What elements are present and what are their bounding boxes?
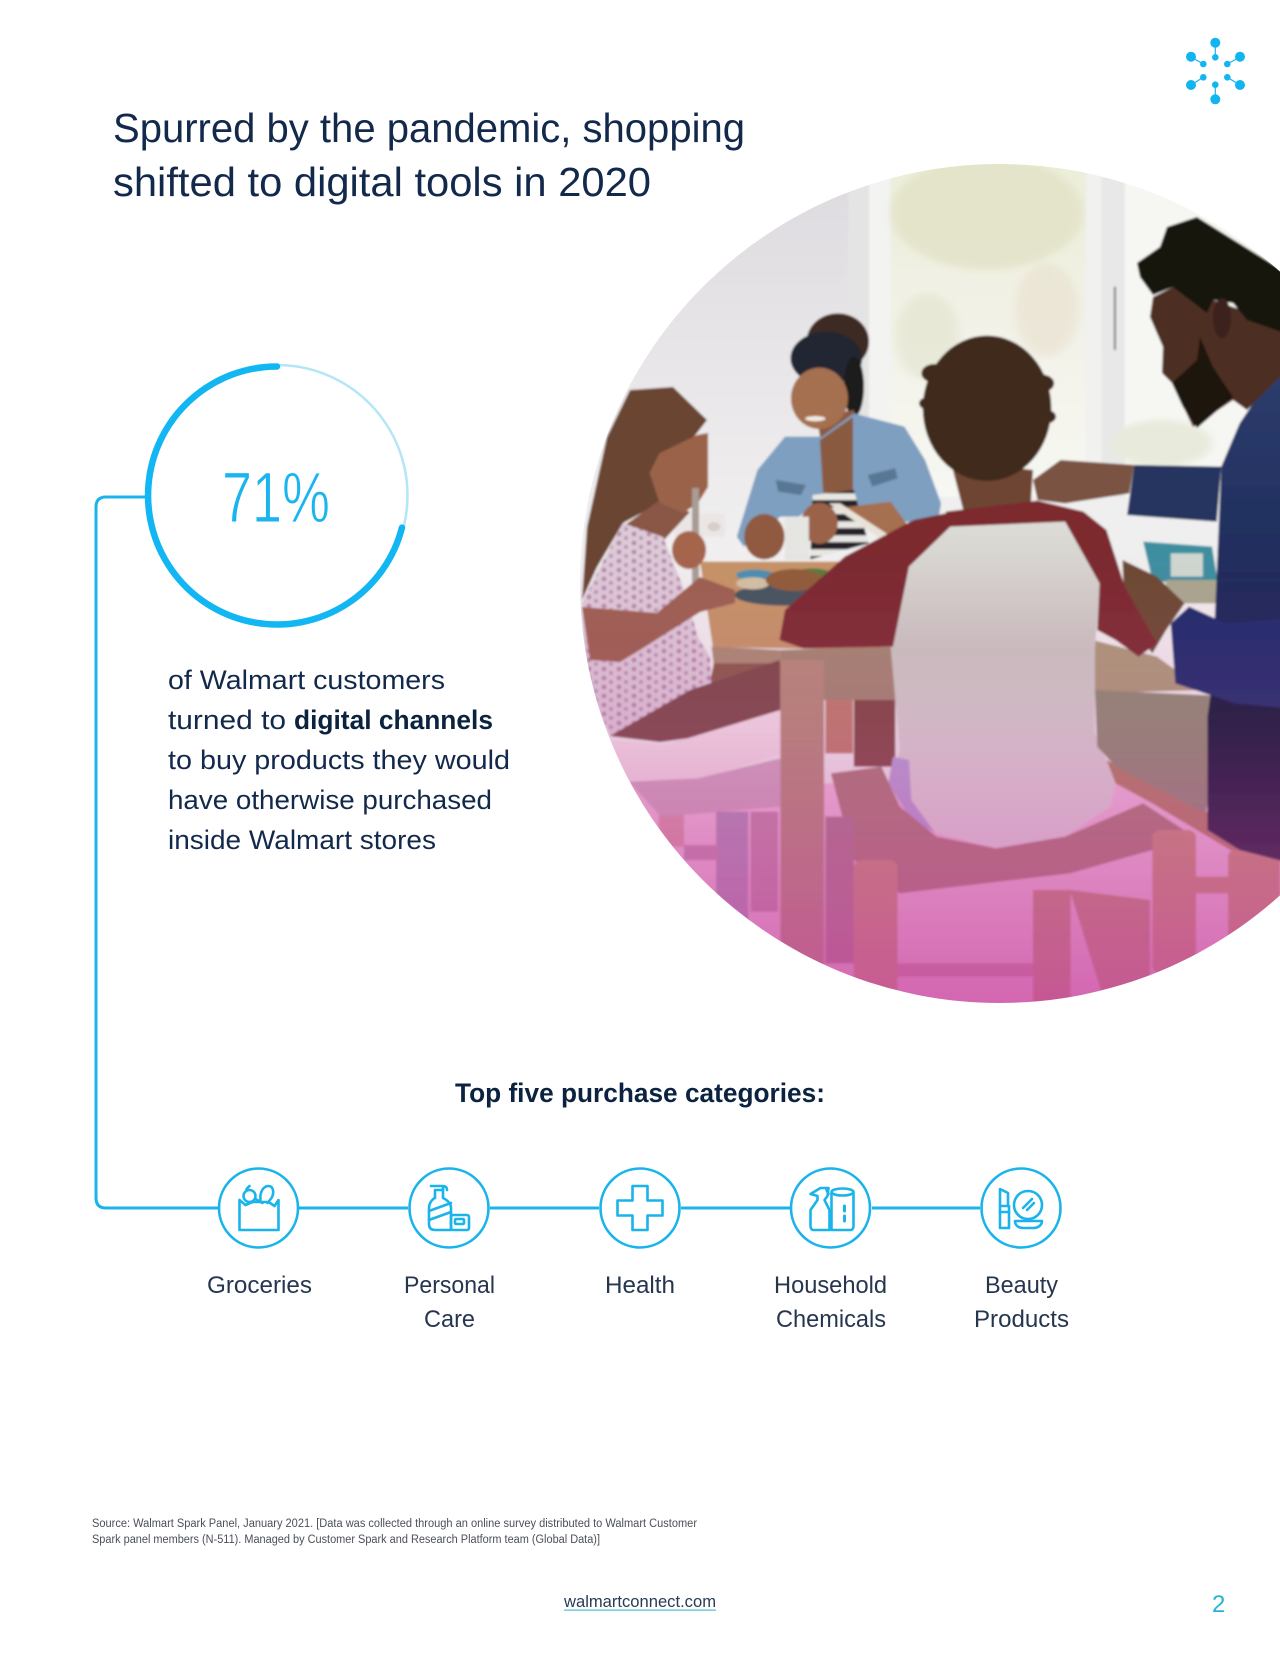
stat description: of Walmart customers	[168, 665, 445, 695]
stat description: have otherwise purchased	[168, 785, 492, 815]
girl	[582, 387, 780, 742]
floor	[630, 782, 1280, 1003]
label	[974, 1272, 1069, 1333]
category: household chemicals	[774, 1168, 887, 1333]
label: Beauty	[985, 1272, 1058, 1299]
stat description: to buy products they would	[168, 745, 510, 775]
category: groceries	[207, 1168, 312, 1299]
title: shifted to digital tools in 2020	[113, 159, 651, 205]
heading: top five purchase categories: Top five purchase categories:	[455, 1078, 825, 1108]
category: personal care	[404, 1168, 495, 1333]
label: Health	[605, 1272, 675, 1299]
icon: grocery bag	[219, 1168, 298, 1248]
boy	[779, 336, 1157, 848]
label: Groceries	[207, 1272, 312, 1299]
mother	[737, 313, 941, 560]
source note: Source: Walmart Spark Panel, January 2021. [Data was collected through an online survey distributed to Walmart Customer	[92, 1518, 697, 1530]
table leg	[780, 660, 824, 970]
stat ring: 71 percent	[146, 365, 408, 626]
stat description: digital channels	[294, 705, 493, 735]
logo: spark icon	[1187, 38, 1244, 104]
girl's chair	[613, 708, 782, 920]
stat description	[168, 665, 510, 855]
icon: lipstick and compact mirror	[982, 1168, 1060, 1248]
pink gradient fade	[580, 580, 1280, 1003]
stat value: 71%	[222, 459, 330, 538]
boy's stool	[825, 760, 1280, 1003]
connector line from ring down to categories	[96, 497, 980, 1208]
label: Chemicals	[776, 1306, 886, 1333]
label	[404, 1272, 495, 1333]
stat description: turned to	[168, 705, 286, 735]
icon: spray bottle and paper towel	[791, 1168, 870, 1248]
title	[113, 105, 745, 205]
icon: medical cross	[600, 1168, 680, 1248]
label: Personal	[404, 1272, 495, 1299]
father's head	[1137, 217, 1280, 428]
category: health	[600, 1168, 680, 1299]
stat description: inside Walmart stores	[168, 825, 436, 855]
far side objects on table	[1093, 542, 1221, 693]
label: Care	[424, 1306, 475, 1333]
table and plate	[698, 562, 895, 767]
label: Household	[774, 1272, 887, 1299]
page number: 2	[1212, 1591, 1225, 1618]
wall and window	[580, 164, 1279, 783]
label: Products	[974, 1306, 1069, 1333]
title: Spurred by the pandemic, shopping	[113, 105, 745, 151]
icon: bottle and soap	[410, 1168, 488, 1248]
source note: Spark panel members (N-511). Managed by Customer Spark and Research Platform team (Global Data)]	[92, 1534, 600, 1546]
photo: family eating at a table, in a circular crop with a pink fade	[580, 164, 1280, 1003]
label	[774, 1272, 887, 1333]
source note	[92, 1518, 697, 1546]
category: beauty products	[974, 1168, 1069, 1333]
footer link: walmartconnect.com	[563, 1592, 716, 1611]
father's body	[1033, 363, 1280, 867]
